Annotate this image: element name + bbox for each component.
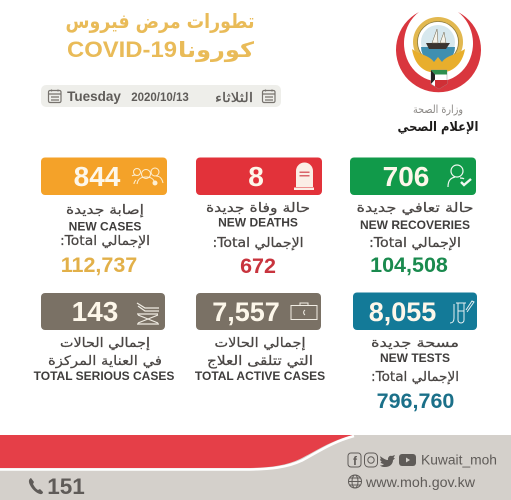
panel: new tests: 8,055 <box>369 297 436 327</box>
icon: calendar left <box>48 90 61 102</box>
panel: new tests: مسحة جديدة <box>371 336 459 351</box>
title: COVID-19 <box>67 37 177 62</box>
date bar: الثلاثاء <box>215 91 253 106</box>
panel: new deaths: NEW DEATHS <box>218 216 298 230</box>
icon: facebook <box>348 453 361 468</box>
panel: new recoveries: 706 <box>383 161 429 192</box>
eagle wings <box>412 49 465 72</box>
ministry logo <box>396 12 481 92</box>
social handle: Kuwait_moh <box>421 452 497 468</box>
panel: new cases: NEW CASES <box>69 220 141 234</box>
panel: new recoveries: NEW RECOVERIES <box>360 218 470 232</box>
panel: new cases: :Total الإجمالي <box>60 234 150 249</box>
panel: new cases: 844 <box>74 161 121 192</box>
panel: total active cases: 7,557 <box>212 297 280 327</box>
icon: people <box>132 168 163 185</box>
panel: total active cases: إجمالي الحالات <box>214 336 306 351</box>
date bar: 2020/10/13 <box>131 92 189 104</box>
panel: new tests: :Total الإجمالي <box>371 370 459 385</box>
panel: new tests: 796,760 <box>377 389 454 413</box>
panel: new recoveries: حالة تعافي جديدة <box>356 201 474 216</box>
panel: new recoveries <box>350 158 476 277</box>
social handle <box>348 452 497 468</box>
hotline: 151 <box>47 474 85 499</box>
date bar: Tuesday <box>67 89 121 104</box>
panel: new deaths: :Total الإجمالي <box>212 236 304 251</box>
ministry name: الإعلام الصحي <box>398 120 478 135</box>
website: www.moh.gov.kw <box>365 475 475 490</box>
footer band <box>0 435 511 500</box>
panel: total active cases: التي تتلقى العلاج <box>207 354 313 369</box>
ministry name: وزارة الصحة <box>413 103 463 116</box>
title <box>66 9 255 62</box>
icon: tombstone <box>294 162 314 190</box>
panel: new deaths: حالة وفاة جديدة <box>206 201 310 216</box>
title: تطورات مرض فيروس <box>66 9 254 33</box>
ministry name <box>398 103 478 135</box>
icon: twitter <box>380 455 395 467</box>
panel: total serious cases: إجمالي الحالات <box>60 336 150 351</box>
red crescent <box>396 12 481 92</box>
icon: facebook: f <box>353 454 358 468</box>
panel: new recoveries: :Total الإجمالي <box>369 236 461 251</box>
panel: total serious cases: في العناية المركزة <box>48 354 162 369</box>
panel: new cases: إصابة جديدة <box>66 203 144 218</box>
panel: new deaths: 672 <box>240 254 276 278</box>
icon: globe <box>348 475 362 488</box>
panel: total active cases: TOTAL ACTIVE CASES <box>195 369 325 383</box>
icon: instagram <box>364 453 378 467</box>
panel: total serious cases: TOTAL SERIOUS CASES <box>34 369 174 383</box>
flag shield <box>431 70 447 89</box>
panel: new tests <box>353 292 477 413</box>
panel: new deaths <box>196 158 322 278</box>
hotline <box>29 474 85 499</box>
emblem <box>413 17 463 67</box>
icon: youtube <box>399 454 416 466</box>
panel: new cases: 112,737 <box>61 253 137 277</box>
icon: calendar right <box>262 90 275 102</box>
icon: phone <box>29 478 43 494</box>
panel: total serious cases: 143 <box>72 296 118 327</box>
panel: new cases <box>41 158 167 277</box>
icon: test tube <box>450 301 474 323</box>
panel: new recoveries: 104,508 <box>370 253 448 277</box>
title: كورونا <box>178 38 255 62</box>
date bar <box>41 85 281 107</box>
icon: person check <box>448 165 471 187</box>
panel: new tests: NEW TESTS <box>380 351 450 365</box>
panel: total serious cases <box>34 293 174 383</box>
icon: hospital bed <box>137 303 159 324</box>
panel: new deaths: 8 <box>248 161 264 192</box>
icon: medical case <box>291 303 317 320</box>
panel: total active cases <box>195 293 325 383</box>
